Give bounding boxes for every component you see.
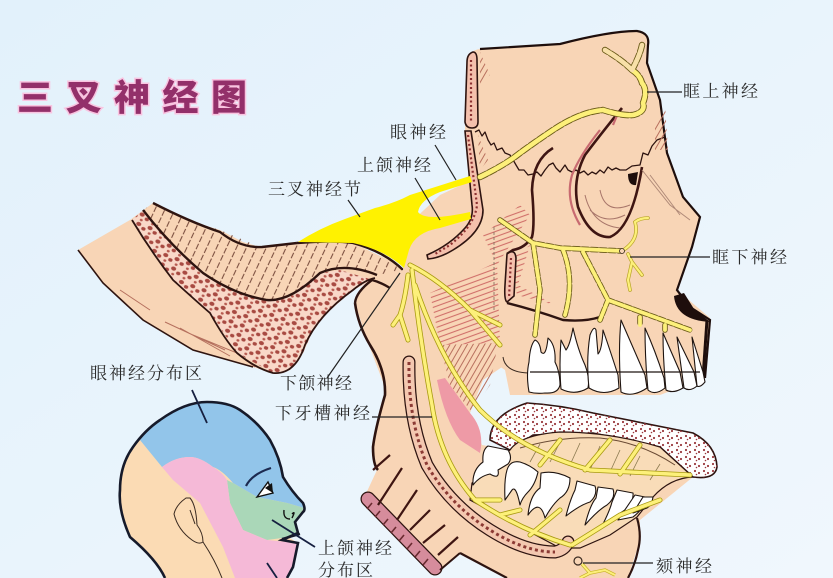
outer contour	[480, 31, 710, 378]
labels: 颏神经	[656, 557, 712, 576]
leader lines	[192, 92, 710, 578]
nerve: infraorbital and alveolar branches	[500, 218, 690, 335]
labels: 上颌神经	[357, 156, 431, 175]
skull	[355, 31, 710, 578]
frontal strip	[465, 52, 478, 128]
labels: 三叉神经节	[268, 180, 361, 199]
mouth	[282, 534, 300, 539]
maxilla lower edge	[507, 303, 600, 321]
title: 三叉神经图	[17, 77, 247, 118]
labels: 眼神经	[390, 123, 446, 142]
eyebrow	[246, 468, 271, 486]
alveolar canal strip	[409, 362, 568, 552]
labels: 眶上神经	[683, 82, 758, 101]
labels: 上颌神经	[318, 539, 392, 558]
nerve: trigeminal ganglion	[298, 176, 472, 268]
labels: 下颌神经	[280, 374, 352, 393]
upper teeth	[528, 320, 705, 394]
muscle hatching	[430, 262, 500, 345]
zygomatic strip	[427, 131, 483, 259]
ear	[174, 498, 222, 578]
labels	[90, 82, 787, 578]
maxilla left strip	[505, 252, 516, 302]
mental nerve	[574, 557, 615, 578]
lower gum	[470, 432, 693, 548]
mandible contours	[355, 280, 640, 578]
orbit	[507, 108, 642, 254]
orbital mark	[628, 172, 638, 185]
nose aperture	[674, 293, 710, 322]
lower teeth	[473, 446, 653, 525]
eye	[257, 482, 273, 497]
face profile inset	[120, 402, 304, 578]
labels: 眼神经分布区	[90, 364, 202, 383]
labels: 下牙槽神经	[275, 404, 370, 423]
lower bone band	[470, 403, 717, 548]
labels: 眶下神经	[712, 248, 787, 267]
nerve: mandibular branches	[393, 265, 690, 545]
suture	[475, 130, 665, 176]
nerve: ophthalmic branch	[480, 45, 645, 177]
nostril	[284, 510, 294, 519]
pink muscle	[437, 378, 481, 453]
chin strip	[368, 499, 435, 568]
temporal bone section	[78, 203, 403, 373]
